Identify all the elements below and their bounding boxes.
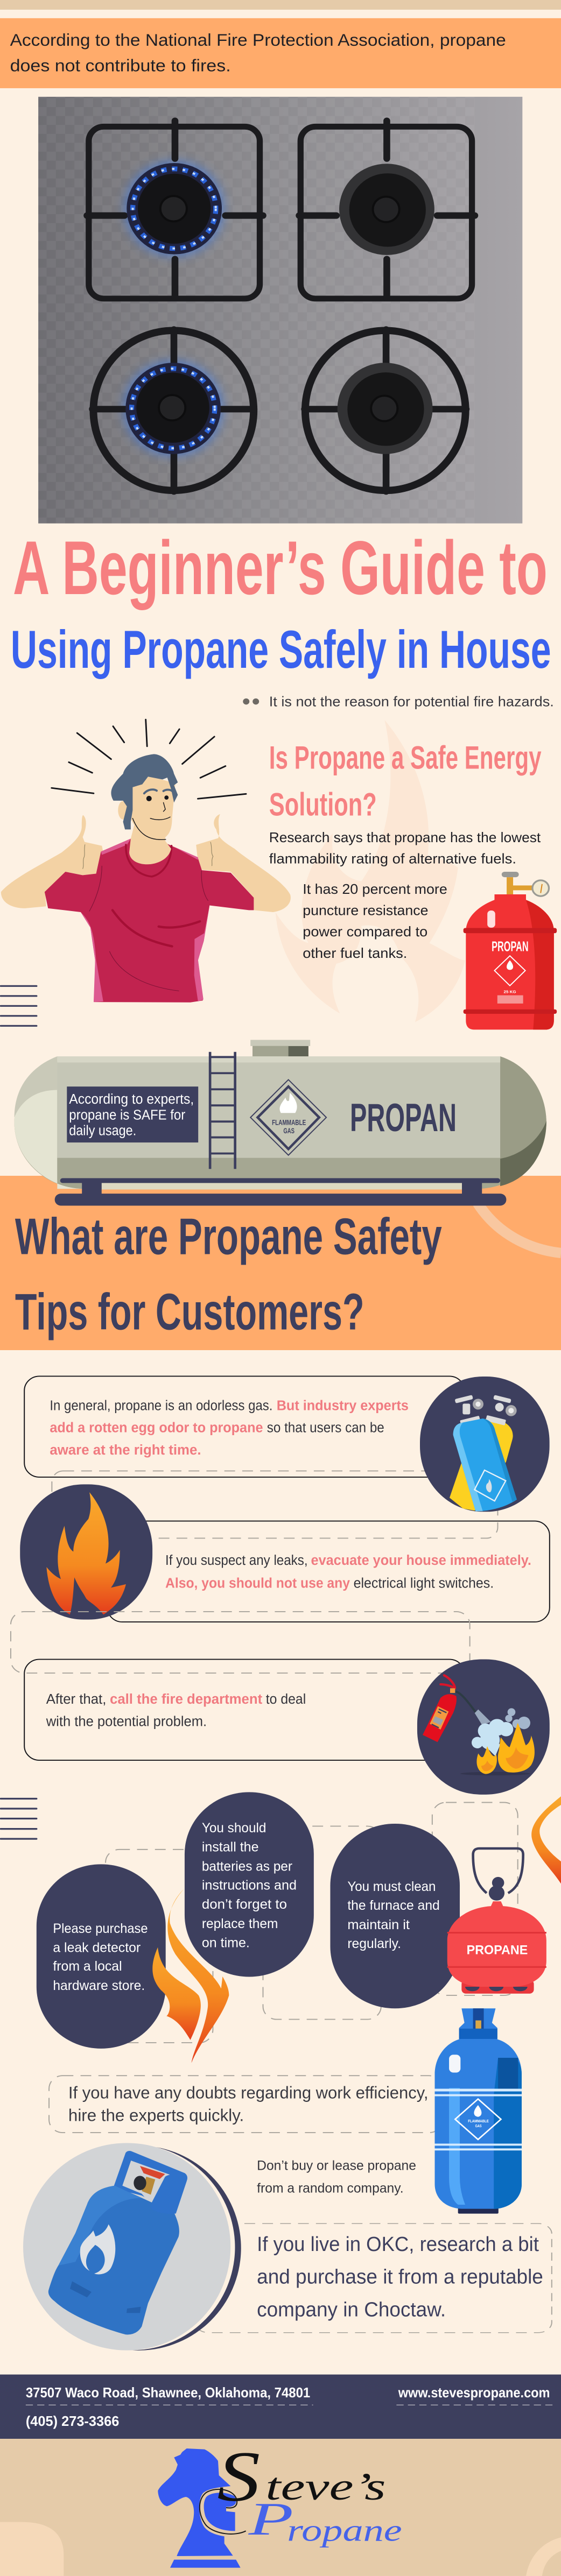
text: hire the experts: hire the experts quickly. xyxy=(68,2106,244,2125)
text: do not buy from random company: from a random company. xyxy=(257,2180,404,2196)
callout: safe for daily usage: propane is SAFE for xyxy=(69,1107,186,1123)
text: puncture resistance: It has 20 percent more xyxy=(303,881,447,897)
flammable gas diamond: FLAMMABLE xyxy=(272,1119,306,1127)
blue cylinder xyxy=(453,1418,517,1511)
text: do not buy from random company: Don’t buy or lease propane xyxy=(257,2158,416,2173)
icon: red propane tank with handle xyxy=(447,1848,546,1994)
text: lowest flammability rating: Research says that propane has the lowest xyxy=(269,830,541,845)
man hair xyxy=(111,754,178,829)
grate: top right xyxy=(299,121,475,299)
top beige band xyxy=(0,0,561,10)
bubble: You should install the batteries: You should xyxy=(202,1820,266,1836)
dashed connector frame 1 xyxy=(52,1471,497,1538)
bubble: Please purchase a leak detector: hardware store. xyxy=(53,1978,145,1993)
burner glow: lit burners xyxy=(123,160,225,456)
shirt collar and folds xyxy=(89,845,208,991)
icon: orange flames between bubbles xyxy=(152,1889,229,2063)
extinguisher label xyxy=(430,1706,448,1730)
valve right xyxy=(486,1395,517,1425)
cylinder handle xyxy=(113,2151,187,2213)
handle opening xyxy=(122,2161,171,2205)
burner: unlit bottom right xyxy=(338,363,433,454)
callout: NFPA statement: According to the National Fire Protection Association, propane xyxy=(10,30,506,50)
tip 3 box: to deal xyxy=(266,1691,306,1707)
tip 1 box: But industry experts xyxy=(277,1398,409,1413)
bubble: You must clean the furnace: regularly. xyxy=(347,1936,401,1951)
icon: red propane tank xyxy=(464,872,557,1029)
text: research in OKC xyxy=(257,2233,543,2321)
logo wordmark: Steve's: teve’s xyxy=(265,2466,386,2508)
bubble: You must clean the furnace: maintain it xyxy=(347,1917,410,1932)
tank top hatch xyxy=(250,1040,310,1061)
man neck xyxy=(129,824,171,864)
grey disc xyxy=(23,2143,230,2351)
decorative flame watermark xyxy=(276,720,465,1022)
burner: lit bottom left xyxy=(125,363,221,454)
tip 2 box xyxy=(107,1521,550,1622)
heading: What are Propane Safety Tips xyxy=(15,1208,442,1340)
tip 1 box: add a rotten egg odor to propane xyxy=(50,1420,263,1435)
man shirt xyxy=(45,839,254,1003)
callout: safe for daily usage: daily usage. xyxy=(69,1123,136,1139)
handle right bar xyxy=(151,2174,187,2214)
flammable gas diamond xyxy=(250,1079,326,1155)
callout: NFPA statement: does not contribute to fires. xyxy=(10,56,231,75)
text: puncture resistance: puncture resistance xyxy=(303,902,429,918)
tip 1 box: In general, propane is an odorless gas. xyxy=(50,1398,272,1413)
decorative lines xyxy=(1,986,37,1026)
tip 1 box: so that users can be xyxy=(267,1420,384,1435)
footer contact band xyxy=(0,2375,561,2439)
logo swirl xyxy=(200,2489,246,2534)
valve knob xyxy=(134,2166,165,2194)
tip 3 box xyxy=(24,1660,465,1760)
text: do not buy from random company xyxy=(257,2158,416,2196)
small flame xyxy=(476,1746,497,1774)
tank body xyxy=(15,1056,546,1189)
hero section in zoom coordinates xyxy=(1,525,557,1029)
tip 1 box: aware at the right time. xyxy=(50,1442,201,1458)
extinguisher handle xyxy=(440,1675,455,1688)
logo wordmark: Steve's xyxy=(217,2437,386,2516)
man left arm xyxy=(1,815,103,908)
man facial features xyxy=(132,789,172,839)
heading: Is Propane a Safe Energy Solution xyxy=(269,740,542,822)
dashed tip frame xyxy=(49,2076,443,2133)
extinguisher neck xyxy=(450,1688,455,1693)
white cloud xyxy=(472,1719,513,1756)
burst lines xyxy=(52,719,246,799)
icon: red propane tank: PROPAN xyxy=(492,938,529,954)
man face xyxy=(131,775,176,840)
bubble: Please purchase a leak detector: from a local xyxy=(53,1959,122,1974)
grate: bottom left xyxy=(92,329,254,491)
text: puncture resistance: power compared to xyxy=(303,923,427,940)
flame logo xyxy=(80,2224,115,2274)
icon: red propane tank: 25 KG xyxy=(504,990,516,994)
burner: lit top left xyxy=(127,163,222,255)
text: not the reason for fire hazards: It is not the reason for potential fire hazards. xyxy=(269,694,554,709)
cylinder body xyxy=(48,2186,179,2334)
grate: bottom right xyxy=(305,329,466,491)
thumbs finger lines xyxy=(83,842,213,869)
base slots xyxy=(70,2281,141,2313)
dashed connector frame 2 xyxy=(11,1612,470,1673)
tip 3 box: call the fire department xyxy=(110,1691,262,1707)
footer contact band: (405) 273-3366 xyxy=(26,2413,119,2429)
tip 2 box: If you suspect any leaks, xyxy=(165,1552,308,1568)
illustration: large propane tank xyxy=(15,1040,546,1205)
bubble: You should install the batteries: replace them xyxy=(202,1916,278,1931)
bubble: You must clean the furnace: You must clean xyxy=(347,1880,436,1894)
illustration: gas stove top xyxy=(38,97,522,524)
bubble: Please purchase a leak detector: a leak detector xyxy=(53,1940,141,1955)
smoke puffs xyxy=(505,1708,530,1729)
cylinder highlight xyxy=(58,2186,142,2266)
heading: What are Propane Safety Tips: Tips for Customers? xyxy=(15,1283,364,1340)
text: lowest flammability rating: flammability rating of alternative fuels. xyxy=(269,851,516,867)
bubble: You should install the batteries: on time. xyxy=(202,1936,250,1951)
flame shadow xyxy=(460,1772,530,1775)
large flame xyxy=(498,1723,535,1773)
bubble: You should install the batteries: install the xyxy=(202,1840,259,1855)
decorative lines xyxy=(1,1798,37,1839)
icon: tall blue propane tank: GAS xyxy=(475,2123,482,2128)
tip 2 circle with flame icon xyxy=(20,1484,152,1620)
bubble: You should install the batteries: batteries as per xyxy=(202,1859,292,1874)
text: hire the experts: If you have any doubts regarding work efficiency, xyxy=(68,2083,429,2102)
bottom section in zoom coordinates xyxy=(0,2158,561,2576)
top section in zoom coordinates xyxy=(0,18,561,524)
bubble: You should install the batteries: instructions and xyxy=(202,1878,297,1893)
photo circle: blue propane cylinder xyxy=(23,2143,241,2351)
tip 2 box: evacuate your house immediately. xyxy=(311,1552,531,1568)
text: research in OKC: company in Choctaw. xyxy=(257,2298,446,2321)
callout: NFPA statement xyxy=(0,18,561,88)
logo wordmark: Propane: ropane xyxy=(287,2513,402,2548)
ladder xyxy=(210,1052,235,1169)
bubble: You must clean the furnace: the furnace and xyxy=(347,1899,440,1913)
hose and nozzle xyxy=(455,1691,475,1712)
heading band xyxy=(0,1176,561,1350)
icon: tall blue propane tank: FLAMMABLE xyxy=(468,2119,489,2123)
burner: unlit top right xyxy=(339,164,434,255)
tank label: PROPAN: PROPAN xyxy=(350,1095,457,1140)
man ear xyxy=(118,801,128,820)
tip 3 circle xyxy=(417,1660,550,1795)
icon: fire extinguisher putting out flames xyxy=(423,1675,535,1775)
tip 2 box: Also, you should not use any xyxy=(165,1575,350,1591)
valve left xyxy=(455,1395,483,1427)
grate: top left xyxy=(87,121,263,299)
tip 2 box: electrical light switches. xyxy=(354,1575,494,1591)
icon: tall blue propane tank xyxy=(434,2008,522,2214)
logo wordmark: Steve's: S xyxy=(217,2437,260,2516)
extinguisher body xyxy=(423,1694,457,1742)
dashed frame: OKC tip xyxy=(195,2224,552,2333)
callout: safe for daily usage: According to experts, xyxy=(69,1091,194,1107)
icon: flame at right edge xyxy=(531,1796,561,1884)
flammable gas diamond: GAS xyxy=(283,1127,294,1135)
heading: Is Propane a Safe Energy Solution: Solution? xyxy=(269,786,377,822)
icon: circle with blue and yellow gas cylinders xyxy=(420,1377,550,1512)
logo wordmark: Propane: P xyxy=(248,2493,293,2545)
shirt pink side strips xyxy=(81,839,209,1002)
tip 3 box: After that, xyxy=(46,1691,106,1707)
illustration: man giving thumbs up xyxy=(1,719,291,1003)
bubble: You should install the batteries: don’t forget to xyxy=(202,1897,287,1912)
logo: Steve's Propane xyxy=(158,2437,402,2568)
dashed connector frames xyxy=(106,1803,518,2043)
text: hire the experts xyxy=(68,2083,429,2125)
cream gap behind circle xyxy=(131,2147,235,2350)
yellow cylinder xyxy=(450,1419,513,1511)
text: puncture resistance xyxy=(303,881,447,961)
text: puncture resistance: other fuel tanks. xyxy=(303,945,407,961)
bullet dots xyxy=(243,698,259,704)
propane section in zoom coordinates xyxy=(0,1040,561,1622)
text: lowest flammability rating xyxy=(269,830,541,867)
footer logo band xyxy=(0,2439,561,2576)
tip 1 box xyxy=(24,1376,465,1477)
logo wordmark: Propane xyxy=(248,2493,402,2548)
callout: safe for daily usage xyxy=(67,1086,198,1142)
hazard diamond xyxy=(474,1470,506,1501)
footer contact band: 37507 Waco Road, Shawnee, Oklahoma, 74801 xyxy=(26,2385,310,2401)
navy crescent xyxy=(131,2147,241,2351)
lower section in zoom coordinates xyxy=(1,1612,561,2214)
logo chess knight xyxy=(158,2448,241,2568)
bubble: Please purchase a leak detector xyxy=(37,1864,166,2049)
bubble: Please purchase a leak detector: Please purchase xyxy=(53,1921,148,1936)
icon: red propane tank with handle: PROPANE xyxy=(467,1943,528,1957)
support frame xyxy=(55,1178,506,1205)
man right arm xyxy=(196,814,291,912)
bubble: You must clean the furnace xyxy=(330,1824,460,2008)
tip 3 box: with the potential problem. xyxy=(46,1713,207,1729)
bubble: You should install the batteries xyxy=(185,1792,314,1977)
